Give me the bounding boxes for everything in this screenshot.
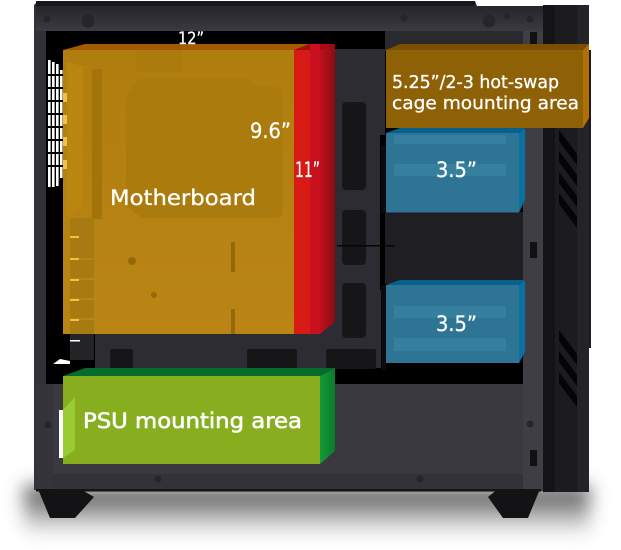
top screws [44,12,534,28]
label: motherboard: Motherboard [110,186,256,210]
PSU white opening [59,410,65,458]
label: 5.25 inch hot-swap cage: cage mounting area [392,93,579,114]
motherboard tray [78,49,385,368]
5.25 inch cage mounting area [386,44,589,128]
lower PCI slot [70,334,94,360]
label: upper 3.5 inch: 3.5” [436,158,477,182]
PSU mounting area [63,368,335,464]
label: 5.25 inch hot-swap cage [392,72,579,114]
front panel [543,5,591,492]
drive cage lower [386,363,523,384]
right foot [488,489,540,518]
label: 5.25 inch hot-swap cage: 5.25”/2-3 hot-swap [392,72,559,93]
upper 3.5 inch drive bay [386,128,525,212]
rear vent [48,60,63,187]
left foot [38,489,94,518]
vertical right rail [523,31,543,491]
11 inch red extension [294,44,335,334]
motherboard area [63,44,310,334]
right drive bay back [385,212,523,284]
label: lower 3.5 inch: 3.5” [436,312,477,336]
bottom PSU shroud [35,384,523,490]
label: 12 inch: 12” [178,29,204,49]
white slot ticks [53,340,80,364]
interior cavity [46,31,523,384]
label: PSU mounting area: PSU mounting area [83,409,302,433]
grommet cutouts [110,102,376,369]
top bar [36,6,543,31]
shroud screws [44,420,534,482]
board details [126,50,283,218]
label: 11 inch: 11” [295,158,320,182]
case shadow [24,486,590,536]
label: 9.6 inch: 9.6” [250,119,291,143]
steel side frame [34,1,543,490]
lower 3.5 inch drive bay [386,280,525,363]
